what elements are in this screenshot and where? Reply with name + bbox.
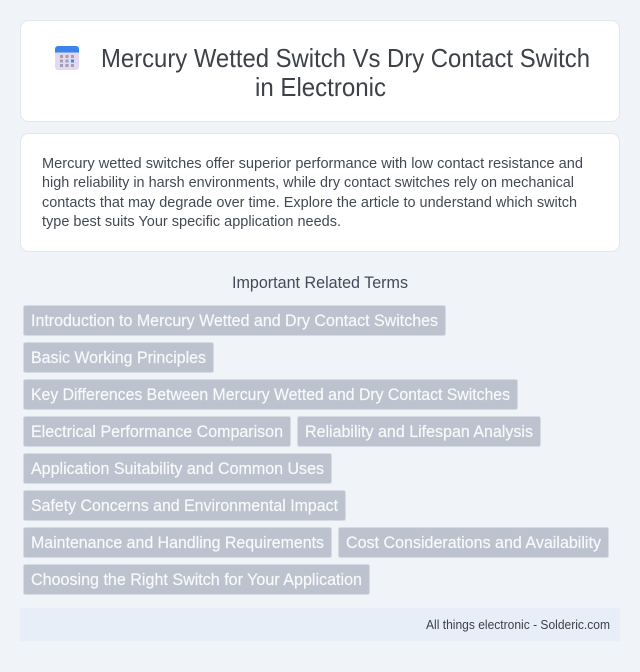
summary paragraph: contacts that may degrade over time. Explore the article to understand which switch bbox=[42, 195, 577, 211]
tag: choosing bbox=[24, 564, 370, 594]
tag: safety bbox=[24, 490, 346, 520]
tag: safety: Safety Concerns and Environmental Impact bbox=[31, 497, 338, 515]
heading: important related terms: Important Related Terms bbox=[232, 274, 408, 292]
summary paragraph: type best suits Your specific application needs. bbox=[42, 214, 341, 230]
tag: key differences bbox=[24, 380, 518, 410]
tag: introduction bbox=[24, 306, 446, 336]
tag: cost: Cost Considerations and Availability bbox=[346, 534, 602, 552]
summary paragraph: high reliability in harsh environments, while dry contact switches rely on mechanical bbox=[42, 175, 574, 191]
tag: choosing: Choosing the Right Switch for Your Application bbox=[31, 571, 362, 589]
panel: title card bbox=[20, 20, 620, 122]
title: Mercury Wetted Switch Vs Dry Contact Switch bbox=[101, 43, 590, 73]
title bbox=[101, 43, 590, 102]
tag list bbox=[24, 306, 608, 594]
summary paragraph bbox=[42, 156, 583, 230]
tag: basic principles bbox=[24, 342, 214, 372]
tag: maintenance: Maintenance and Handling Requirements bbox=[31, 534, 324, 552]
tag: electrical performance bbox=[24, 416, 290, 446]
tag: electrical performance: Electrical Performance Comparison bbox=[31, 423, 283, 441]
tag: cost bbox=[338, 528, 608, 558]
tag: maintenance bbox=[24, 528, 332, 558]
tag: key differences: Key Differences Between Mercury Wetted and Dry Contact Switches bbox=[31, 386, 510, 404]
tag: application suitability bbox=[24, 454, 332, 484]
title: in Electronic bbox=[255, 72, 386, 102]
tag: application suitability: Application Suitability and Common Uses bbox=[31, 460, 324, 478]
tag: reliability: Reliability and Lifespan Analysis bbox=[305, 423, 533, 441]
tag: basic principles: Basic Working Principles bbox=[31, 349, 206, 367]
tag: reliability bbox=[298, 416, 540, 446]
tag: introduction: Introduction to Mercury Wetted and Dry Contact Switches bbox=[31, 312, 438, 330]
summary paragraph: Mercury wetted switches offer superior performance with low contact resistance and bbox=[42, 156, 583, 172]
panel: summary text bbox=[20, 134, 620, 252]
footer bar bbox=[20, 608, 620, 641]
footer credit: All things electronic - Solderic.com bbox=[426, 618, 610, 632]
icon: calendar grid bbox=[55, 46, 79, 70]
